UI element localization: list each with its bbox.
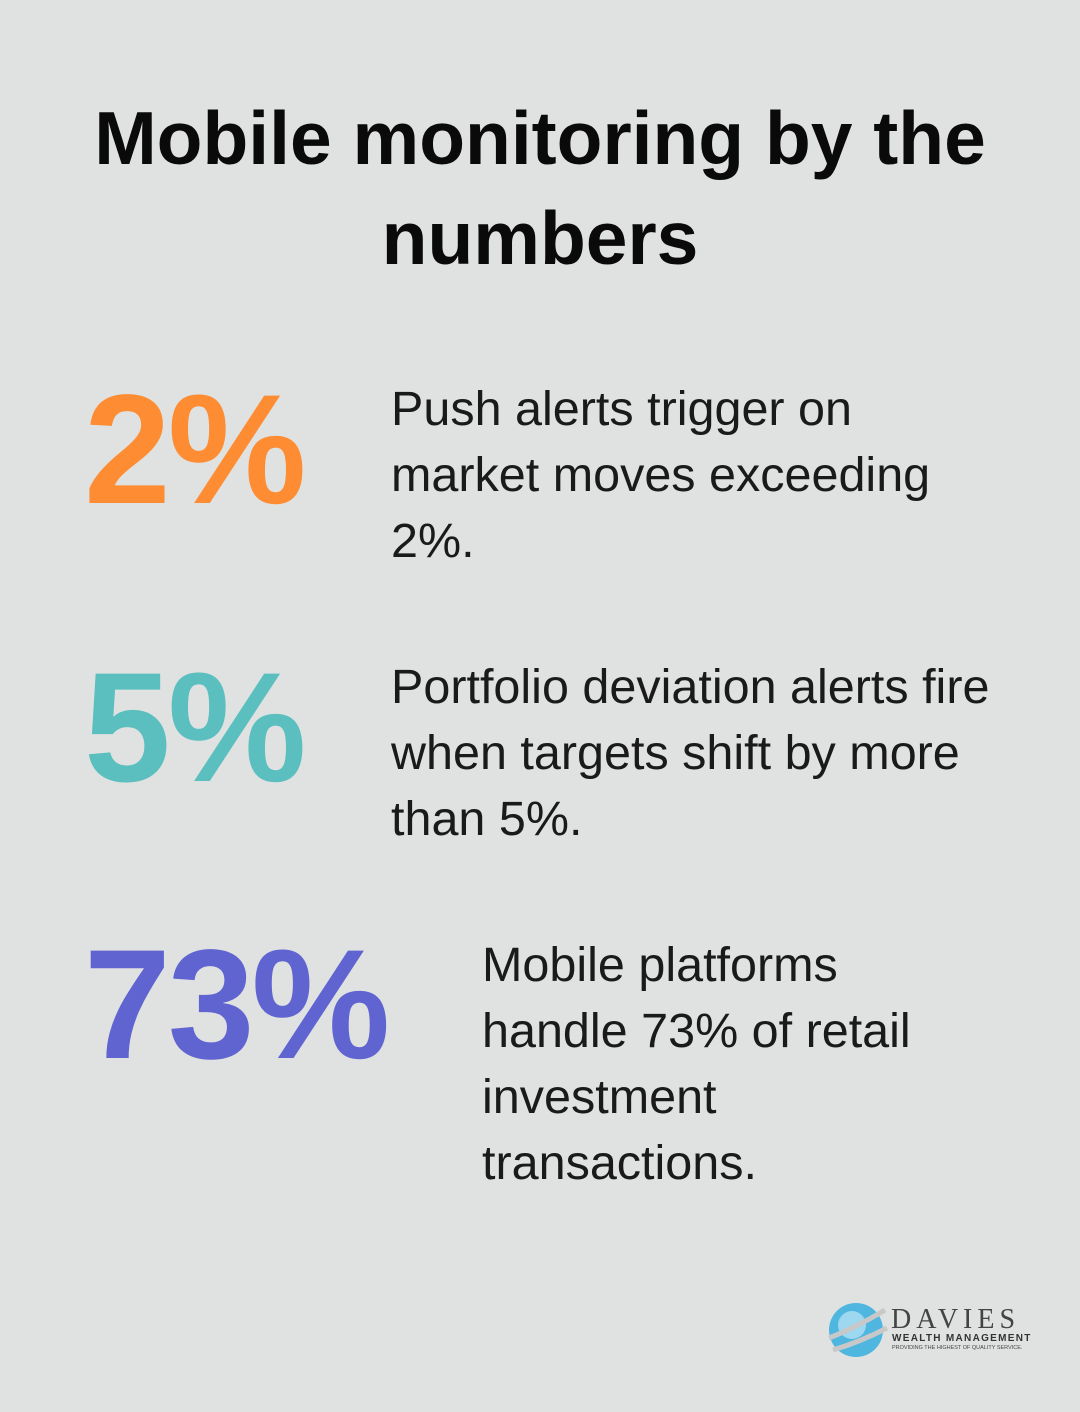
text: portfolio deviation: Portfolio deviation alerts fire [391,660,989,714]
logo: Davies Wealth Management [828,1303,1032,1357]
text: mobile platforms: transactions. [482,1136,757,1190]
text: push alerts: 2%. [391,514,475,568]
text: mobile platforms: handle 73% of retail [482,1004,911,1058]
logo: Davies Wealth Management: PROVIDING THE HIGHEST OF QUALITY SERVICE. [892,1345,1022,1351]
title: Mobile monitoring by the [94,96,986,180]
text: push alerts: Push alerts trigger on [391,382,852,436]
stat: 2%: 2% [84,363,303,537]
text: push alerts: market moves exceeding [391,448,930,502]
text: mobile platforms: Mobile platforms [482,938,838,992]
text: push alerts [391,382,930,568]
logo text: DAVIES [891,1304,1020,1335]
title [94,96,986,280]
title: numbers [382,196,698,280]
text: portfolio deviation: when targets shift by more [391,726,960,780]
stat: 73%: 73% [84,918,387,1092]
icon: globe [828,1303,888,1357]
text: portfolio deviation: than 5%. [391,792,582,846]
text: mobile platforms [482,938,911,1190]
text: mobile platforms: investment [482,1070,717,1124]
stat: 5%: 5% [84,641,303,815]
text: portfolio deviation [391,660,989,846]
logo: Davies Wealth Management: WEALTH MANAGEMENT [892,1333,1032,1344]
